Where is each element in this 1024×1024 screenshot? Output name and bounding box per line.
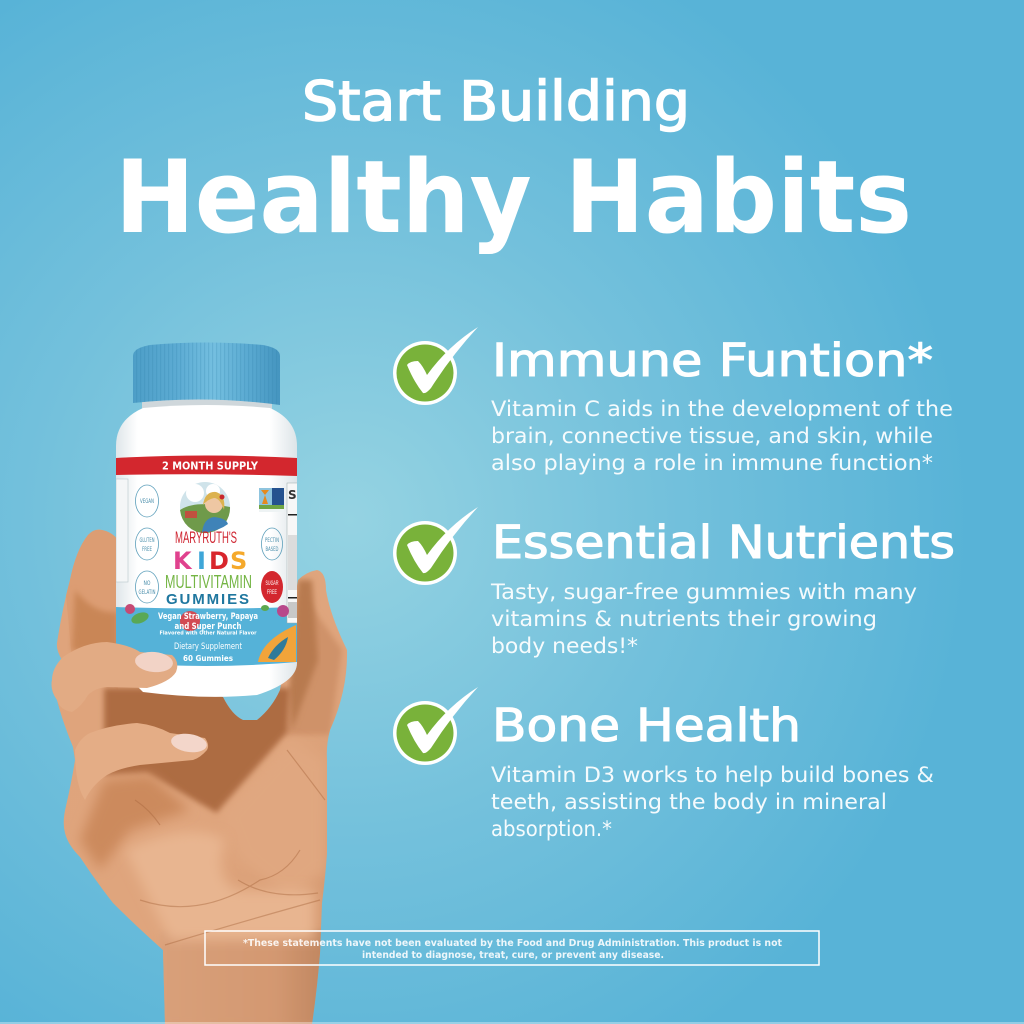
heading: essential nutrients: Essential Nutrients [492,516,955,569]
disclaimer box: intended to diagnose, treat, cure, or prevent any disease. [362,950,664,961]
MULTIVITAMIN: MULTIVITAMIN [165,572,252,592]
left info panel [116,479,128,582]
bottle label [116,456,305,666]
bottle cap [133,342,280,405]
flavor text: 60 Gummies [183,654,234,663]
text: essential nutrients description: vitamins & nutrients their growing [491,607,877,631]
title: Healthy Habits [115,138,912,256]
KIDS [175,551,246,570]
bottle [116,342,305,697]
benefit: bone health [393,687,934,841]
supplement facts panel [286,482,297,624]
sugar free badge: FREE [267,589,277,596]
text: bone health description [491,763,934,841]
heading: bone health: Bone Health [492,699,801,752]
icon: green check [393,327,478,405]
blue flavor band [116,607,297,666]
text: immune function description: Vitamin C aids in the development of the [491,397,953,421]
text: essential nutrients description: Tasty, sugar-free gummies with many [490,580,917,604]
text: essential nutrients description: body needs!* [491,634,638,658]
KIDS: D [209,547,229,575]
flavor text: Dietary Supplement [174,642,242,652]
bottle label: 2 MONTH SUPPLY [162,460,258,472]
title: Start Building [302,70,690,133]
bottle label: FREE [142,545,152,553]
hand: palm, wrist and back fingers [40,520,360,1024]
disclaimer box: *These statements have not been evaluated by the Food and Drug Administration. This product is not [243,938,782,949]
icon: green check [393,687,478,765]
KIDS: K [173,547,193,575]
text: essential nutrients description [490,580,917,658]
bottle label: GELATIN [138,588,156,596]
hand holding bottle [40,342,360,1024]
benefit: essential nutrients [393,507,955,658]
icon: green check [393,507,478,585]
benefit: immune function [393,327,953,475]
bottle label: PECTIN [265,536,279,544]
heading: immune function: Immune Funtion* [492,334,933,387]
flavor text: Vegan Strawberry, Papaya [158,612,258,622]
KIDS: S [230,547,247,575]
fruit illustrations [125,604,296,662]
text: bone health description: Vitamin D3 works to help build bones & [491,763,934,787]
non-GMO badge [259,488,284,512]
brand name: MARYRUTH'S [175,528,237,547]
supplement facts panel: Su [288,488,305,502]
bottle body [116,405,297,697]
red supply band [116,456,297,476]
text: immune function description: also playing a role in immune function* [491,451,933,475]
text: bone health description: teeth, assisting the body in mineral [491,790,887,814]
text: immune function description [491,397,953,475]
palm creases [135,750,325,945]
KIDS: I [197,547,206,575]
bottle label: GLUTEN [140,536,155,544]
flavor text: and Super Punch [174,622,242,632]
text: immune function description: brain, connective tissue, and skin, while [491,424,933,448]
front finger over bottle [52,642,177,712]
bottle label: BASED [266,545,278,553]
text: bone health description: absorption.* [491,817,612,841]
GUMMIES: GUMMIES [166,591,249,608]
disclaimer box [205,931,819,965]
flavor text: Flavored with Other Natural Flavor [160,630,257,636]
bottle label: VEGAN [140,497,154,505]
fingernail 2 [170,732,208,754]
fingernail 1 [134,650,174,674]
sugar free badge: SUGAR [266,580,279,587]
claim badges [136,485,282,603]
bottle neck [142,396,272,414]
flavor text [158,612,258,663]
lower finger [75,723,208,800]
logo badge [180,482,230,533]
bottle label: NO [144,579,150,587]
title [115,70,912,256]
sugar free badge [261,571,283,603]
